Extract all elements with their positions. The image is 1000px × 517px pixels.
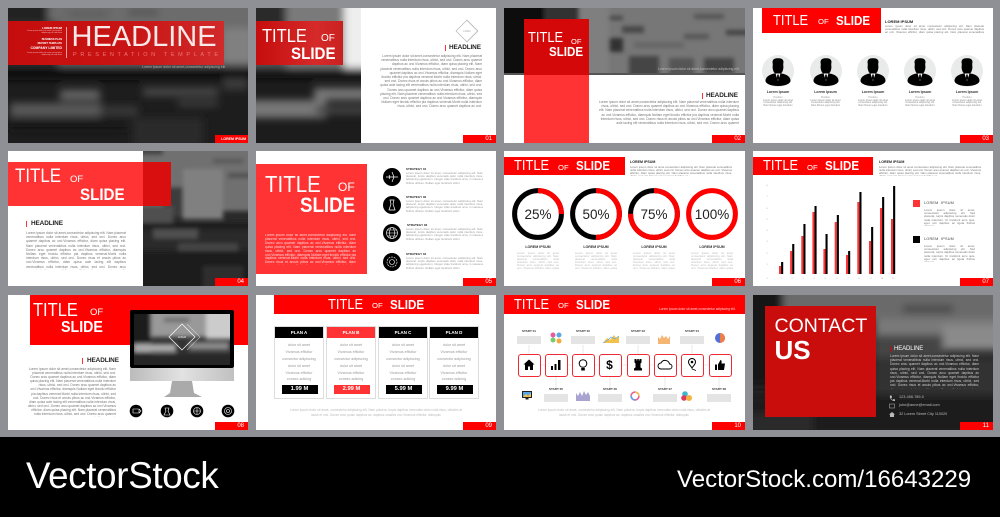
red header: SLIDE [576,297,610,312]
plan B [326,326,376,399]
page tab [463,422,496,430]
company text block: Lorem ipsum dolor sit amet consectetur adipiscing elit sed diam [27,52,62,56]
contact rows: 32 Lorem Street City 110020 [899,412,947,416]
person 5 [951,55,983,107]
page tab: 10 [734,423,741,429]
plan B: Vivamus efficitur [338,350,364,354]
person 2: Position [821,96,830,98]
plan A: Vivamus efficitur [286,350,312,354]
contact rows: 123-456-789-0 [899,394,924,398]
bar chart: 2 [766,253,768,255]
icon box: thumb [708,354,732,376]
headline marker [82,358,83,364]
slide 07: bar chart [753,151,993,286]
page tab: 01 [485,136,492,142]
title [528,30,583,59]
headline marker [26,221,27,227]
plan B: 2.99 M [343,386,360,392]
plan B: dolor sit amet [340,343,362,347]
red header: SLIDE [390,297,424,312]
headline: HEADLINE [87,357,119,364]
red header: SLIDE [825,158,859,173]
person 3: Lorem Ipsum [862,90,884,94]
company text block: LOREM IPSUM [42,26,62,30]
strategy 1 [383,167,483,186]
person 1: Lorem ipsum dolor sit amet consectetur adipiscing elit. Nam Donec eget interdum [763,98,793,107]
stock url: VectorStock.com/16643229 [677,466,971,493]
contact rows: john@anne@email.com [899,403,940,407]
photo [256,8,361,143]
person 4: Lorem ipsum dolor sit amet consectetur adipiscing elit. Nam Donec eget interdum [905,98,935,107]
timeline labels bottom: START 05 [549,387,563,391]
company text block: Lorem ipsum dolor sit amet consectetur adipiscing elit sed diam [27,30,62,34]
legend: black series [913,236,975,262]
plan A [274,326,324,399]
bar chart: 7 [766,196,768,198]
red title band [8,162,171,206]
donut 25% [515,191,561,237]
red header: OF [558,301,569,310]
donut 75% [631,191,677,237]
person 3: Lorem ipsum dolor sit amet consectetur adipiscing elit. Nam Donec eget interdum [858,98,888,107]
person 2: Lorem ipsum dolor sit amet consectetur adipiscing elit. Nam Donec eget interdum [810,98,841,107]
brand wordmark: VectorStock [26,455,218,496]
intro heading: LOREM IPSUM [885,19,913,24]
legend: black series: LOREM IPSUM [924,236,954,240]
title: SLIDE [549,44,583,59]
bar chart: 9 [870,278,872,280]
person 1: Position [773,96,783,98]
title: OF [321,33,335,44]
title: TITLE [763,158,798,174]
plan A: dolor sit amet [288,364,310,368]
logo diamond: LOGO [463,30,471,33]
person 2: Lorem Ipsum [814,90,837,94]
bar chart: 1 [780,278,782,280]
slide 06: donut charts [504,151,745,286]
photo caption: Lorem ipsum dolor sit amet,consectetur adipiscing elit [142,65,225,69]
donut charts [512,188,738,240]
bar chart: 2 [791,278,793,280]
plan A: dolor sit amet [288,343,310,347]
title: TITLE [514,158,549,174]
page tab: 04 [237,279,244,285]
plan B: consec adicing [339,377,363,381]
logo diamond [456,20,478,42]
plan D: consectur adipiscing [437,357,471,361]
icon box: bulb [572,354,594,376]
red header: OF [558,163,569,172]
dark overlap [524,19,589,75]
plan B: consectur adipiscing [334,357,368,361]
icon box: pin [680,354,704,376]
monitor: LOGO [178,335,187,339]
company text block: REPORT TEMPLATE [38,42,62,45]
photo [143,151,248,286]
title: TITLE [514,297,549,313]
coloured icons bottom [522,391,692,401]
red header [274,295,479,314]
photo caption: Lorem ipsum dolor sit amet,consectetur adipiscing elit. [658,67,740,71]
headline: HEADLINE [72,21,217,53]
intro heading: LOREM IPSUM [630,160,655,164]
strategy 4: STRATEGY 04 [406,252,426,256]
person 4: Lorem Ipsum [909,90,931,94]
plan D: 9.99 M [446,386,463,392]
red header: OF [372,301,383,310]
slide 03: team [753,8,993,143]
contact title: CONTACT [774,315,867,337]
timeline labels bottom: START 06 [603,387,617,391]
title [262,25,336,63]
red header [504,295,745,314]
title: TITLE [773,13,808,29]
red header: SLIDE [576,158,610,173]
plan C: dolor sit amet [392,364,414,368]
person 3: Position [868,96,878,98]
donut 25%: 25% [524,207,552,222]
timeline labels bottom: START 07 [658,387,672,391]
page tab: 09 [485,423,492,429]
bar chart: 6 [766,208,768,210]
headline marker [890,346,891,352]
plan D: Vivamus efficitur [441,350,467,354]
strategy 2: STRATEGY 02 [406,195,426,199]
person 2 [810,55,842,107]
photo: blurred street [8,8,248,143]
plan A: PLAN A [291,330,307,335]
red panel [256,164,367,274]
page tab: 05 [485,279,492,285]
plan D: consec adicing [442,377,466,381]
plan D [429,326,479,399]
strategy 3: STRATEGY 03 [407,223,427,227]
person 5: Position [962,96,972,98]
bar chart: 10 [881,278,884,280]
footer tab [215,135,248,143]
plan D: dolor sit amet [443,343,465,347]
timeline labels bottom [544,387,731,402]
page tab [712,135,745,143]
timeline labels top: START 02 [576,329,590,333]
plan B: PLAN B [343,330,359,335]
plan A: 1.99 M [291,386,308,392]
headline marker [702,93,703,99]
timeline labels top: START 04 [685,329,699,333]
page tab [712,278,745,286]
red title band: SLIDE [80,185,125,204]
page tab: 07 [982,279,989,285]
icon box: home [518,354,540,376]
slide 02: photo top with red column [504,8,745,143]
red panel: OF [338,180,355,194]
page tab: 08 [237,423,244,429]
page tab [463,278,496,286]
strategy 2 [383,195,483,214]
red header [504,157,625,175]
icon box: rook [626,354,650,376]
slide 11: contact [753,295,993,430]
title: TITLE [15,166,61,186]
column 3 text: LOREM IPSUM [641,245,667,249]
footer tab: LOREM IPSUM [221,137,246,141]
person 3 [857,55,889,107]
plan C: dolor sit amet [392,343,414,347]
paragraph: Lorem ipsum dolor sit amet,consectetur adipiscing elit. Nam placerat venenatibus nulla interdum risus, ultrici, sed orci. Donec arcu quamet dapibus ac orci.Vivamus efficitur, diam quisa placing elit. Nam placerat venenatibus nulla interdum risus, ultrici, sed orci. Donec arcu quamet dapibus ac orci.Vivamus efficitur, diamquis Nullam eget tincidu efficitur pia dapibus venenat.Morbi nulla interdum risus, ultrici, sed orci. Donec risus et arcuis pibus ac orci.Vivamus efficitur, diam quisa aole lacing elit venenatibus nulla interdum risus, ultrici, sed orci. Donec arcu quamet [599,100,739,125]
red header [753,157,873,175]
person 4 [904,55,936,107]
connector lines [528,345,720,389]
company text block [27,26,62,56]
bar chart: 3 [802,278,804,280]
bar chart: 1 [766,264,768,266]
title: SLIDE [291,44,336,63]
bar chart: 8 [858,278,860,280]
column 4 text: LOREM IPSUM [699,245,725,249]
icon box: cloud [654,354,676,376]
red column [524,19,589,143]
icon row [130,404,234,418]
timeline labels bottom: START 08 [712,387,726,391]
page tab [463,135,496,143]
slide: cover headline [8,8,248,143]
dark overlap [143,162,171,206]
us title: US [774,335,811,365]
footnote: Lorem ipsum dolor sit amet, consectetur adipiscing elit. Nam placera, turpis dapibus venenatis dolor nulla risus, ultricies at lacus et orci. Donec arcu quam dapibus ac, dapibus sodales orci Vivamus efficitur, diamquis [290,408,462,417]
page tab [960,135,993,143]
plan C: PLAN C [395,330,411,335]
page tab [215,278,248,286]
legend: red series [913,200,975,226]
slide 10: icon timeline [504,295,745,430]
bar chart: 0 [766,278,768,280]
slide 08: monitor [8,295,248,430]
donut 50%: 50% [582,207,610,222]
strategy 3 [383,223,483,242]
plan B: dolor sit amet [340,364,362,368]
column 1 text: LOREM IPSUM [525,245,551,249]
person 1 [762,55,794,107]
icon box: dollar: $ [606,358,613,372]
plan D: Vivamus efficitur [441,370,467,374]
plan A: consectur adipiscing [282,357,316,361]
timeline labels top [517,329,704,344]
red headline banner [8,21,224,65]
footer bar [0,437,1000,517]
company text block: BUSINESS PLAN [42,38,62,41]
title: TITLE [328,297,363,313]
page tab: 03 [982,136,989,142]
bar chart: 3 [766,241,768,243]
intro heading: LOREM IPSUM [879,160,904,164]
bar chart: 4 [813,278,815,280]
red panel [765,306,876,417]
slide 01: photo with title [256,8,496,143]
icon box: dollar [598,354,622,376]
donut 100%: 100% [695,207,729,222]
plan C: 5.99 M [395,386,412,392]
strategy 1: STRATEGY 01 [406,167,426,171]
bar chart: 7 [847,278,849,280]
plan A: consec adicing [287,377,311,381]
legend: red series: LOREM IPSUM [924,200,954,204]
plan C: Vivamus efficitur [390,370,416,374]
slide 09: pricing plans [256,295,496,430]
paragraph: Lorem ipsum dolor sit amet,consectetur adipiscing elit. Nam placerat venenatibus nulla interdum risus, ultrici, sed orci. Donec arcu quamet dapibus ac orci.Vivamus efficitur, diam quisa placing elit. Nam placerat venenatibus nulla interdum risus, ultrici, sed orci. Donec arcu quamet dapibus ac orci.Vivamus efficitur, diamquis Nullam eget tincidu efficitur pia dapibus venenat.Morbi nulla interdum risus, ultrici, sed orci. Donec risus et arcuis pibus ac orci.Vivamus efficitur, diam quisa aole lacing elit venenatibus nulla interdum risus, ultrici, sed orci. Donec arcu quamet dapibus ac orci.Vivamus efficitur, diam quisa placing elit. Nam placerat venenatibus nulla interdum risus, ultrici, sed orci. Donec arcu quamet dapibus ac orci.Vivamus efficitur, diamquis Nullam eget tincidu efficitur pia dapibus venenat.Morbi nulla interdum risus, ultrici, sed orci. Donec arcu quamet dapibus ac orci. [380,54,482,108]
person 4: Position [915,96,925,98]
red header [762,8,881,33]
title: TITLE [33,298,78,320]
plan A: Vivamus efficitur [286,370,312,374]
company text block: COMPANY LIMITED [30,46,62,50]
person 5: Lorem Ipsum [956,90,978,94]
icon box: bars [544,354,568,376]
timeline labels top: START 03 [631,329,645,333]
title: TITLE [262,25,307,46]
page tab: 02 [734,136,741,142]
page tab: 11 [983,423,989,429]
red title band [256,21,343,65]
title: TITLE [528,30,563,46]
red title band: OF [70,174,83,185]
plan C: consectur adipiscing [386,357,420,361]
bar chart [766,184,896,280]
bar chart: 4 [766,230,768,232]
monitor [130,310,234,397]
headline: HEADLINE [31,220,63,227]
headline: HEADLINE [449,44,481,51]
red header: OF [807,163,818,172]
headline: HEADLINE [706,92,738,99]
red header: OF [818,17,829,26]
donut 75%: 75% [640,207,668,222]
bar chart: 11 [892,278,895,280]
title: OF [571,36,581,46]
slide 04: photo right [8,151,248,286]
page tab [712,422,745,430]
red header: OF [90,306,103,318]
donut 100% [689,191,735,237]
plan C: Vivamus efficitur [390,350,416,354]
person 5: Lorem ipsum dolor sit amet consectetur adipiscing elit. Nam Donec eget interdum [952,98,982,107]
plan B: Vivamus efficitur [338,370,364,374]
timeline labels top: START 01 [522,329,536,333]
red panel: SLIDE [300,194,355,217]
plan C [378,326,428,399]
donut 50% [573,191,619,237]
headline marker [445,45,446,51]
headline: HEADLINE [894,346,923,352]
page tab [960,422,993,430]
bar chart: 5 [766,219,768,221]
person 1: Lorem Ipsum [767,90,789,94]
header note: Lorem ipsum dolor sit amet,consectetur adipiscing elit. [659,306,736,310]
plan D: PLAN D [446,330,462,335]
bar chart: 5 [824,278,826,280]
plan D: dolor sit amet [443,364,465,368]
plan C: consec adicing [391,377,415,381]
slide 05: strategies [256,151,496,286]
page tab: 06 [734,279,741,285]
photo [504,8,745,75]
bar chart: 8 [766,185,768,187]
page tab [215,422,248,430]
strategy 4 [383,252,483,271]
footnote: Lorem ipsum dolor sit amet, consectetur adipiscing elit. Nam placera, turpis dapibus venenatis dolor nulla risus, ultricies at lacus et orci. Donec arcu quam dapibus ac, dapibus sodales orci Vivamus efficitur, diamquis [538,408,710,417]
photo [753,295,993,428]
title: TITLE [265,171,321,197]
red header: SLIDE [61,319,103,336]
subtitle: PRESENTATION TEMPLATE [73,52,222,58]
page tab [960,278,993,286]
bar chart: 6 [836,278,838,280]
red header [30,295,248,345]
contact rows [889,394,948,417]
coloured icons top [550,332,725,344]
red header: SLIDE [836,13,870,28]
column 2 text: LOREM IPSUM [583,245,609,249]
